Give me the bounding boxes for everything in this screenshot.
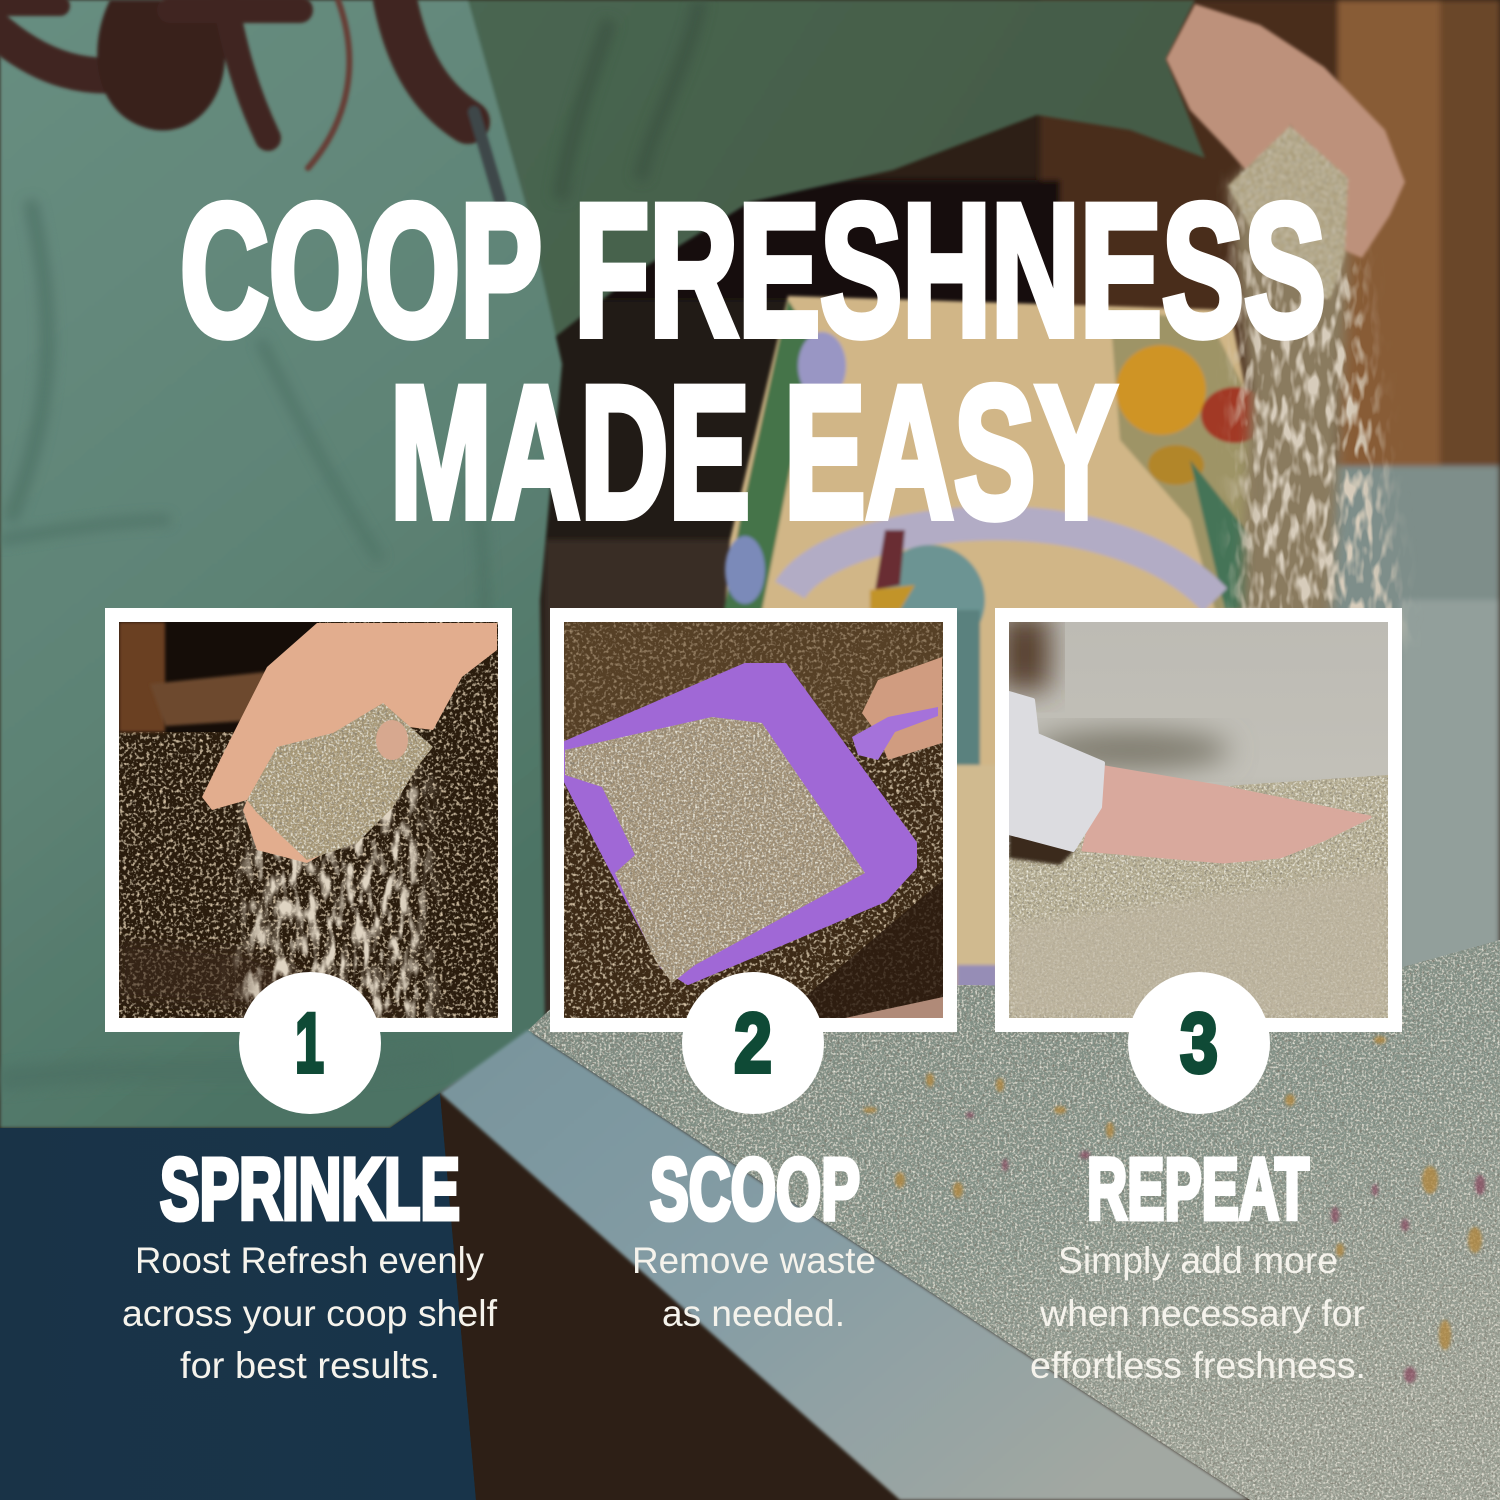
step 2 number badge (682, 972, 824, 1114)
step 3 text: repeat (1030, 1141, 1366, 1386)
step 3 text: repeat: REPEAT (1087, 1141, 1309, 1238)
dark gap under shelf (440, 1093, 900, 1500)
step 2 text: scoop (632, 1141, 876, 1334)
step 1 text: sprinkle: for best results. (180, 1345, 440, 1386)
step 3 text: repeat: Simply add more (1058, 1240, 1338, 1281)
step 3 number badge (1128, 972, 1270, 1114)
step 3 text: repeat: when necessary for (1039, 1293, 1365, 1334)
panel: step 1 sprinkle photo (105, 608, 512, 1040)
shelf front (440, 1030, 1250, 1500)
step 1 number badge (239, 972, 381, 1114)
shelf top with bedding (528, 940, 1500, 1500)
step 1 number badge: 1 (295, 996, 324, 1090)
jeans (0, 1093, 476, 1500)
step 2 text: scoop: SCOOP (650, 1141, 860, 1238)
panel: step 2 scoop photo (550, 608, 957, 1032)
panel: step 3 repeat photo (995, 608, 1402, 1032)
hand on scoop handle (862, 657, 942, 760)
step 3 number badge: 3 (1180, 996, 1218, 1090)
step 1 text: sprinkle: Roost Refresh evenly (135, 1240, 484, 1281)
title: MADE EASY (390, 347, 1117, 557)
falling bedding stream (1228, 126, 1400, 640)
step 3 text: repeat: effortless freshness. (1030, 1345, 1366, 1386)
raised hand (1166, 4, 1405, 300)
hair (0, 0, 500, 200)
petals on shelf (863, 1036, 1482, 1350)
product bag with flowers and hen (724, 296, 1310, 1000)
title (180, 165, 1326, 557)
step 2 text: scoop: Remove waste (632, 1240, 876, 1281)
step 1 text: sprinkle (122, 1141, 498, 1386)
step 2 number badge: 2 (734, 996, 772, 1090)
step 1 text: sprinkle: across your coop shelf (122, 1293, 498, 1334)
step 2 text: scoop: as needed. (662, 1293, 845, 1334)
step 1 text: sprinkle: SPRINKLE (160, 1141, 460, 1238)
purple scoop (565, 665, 915, 983)
sweatshirt fold shading (0, 0, 700, 1080)
